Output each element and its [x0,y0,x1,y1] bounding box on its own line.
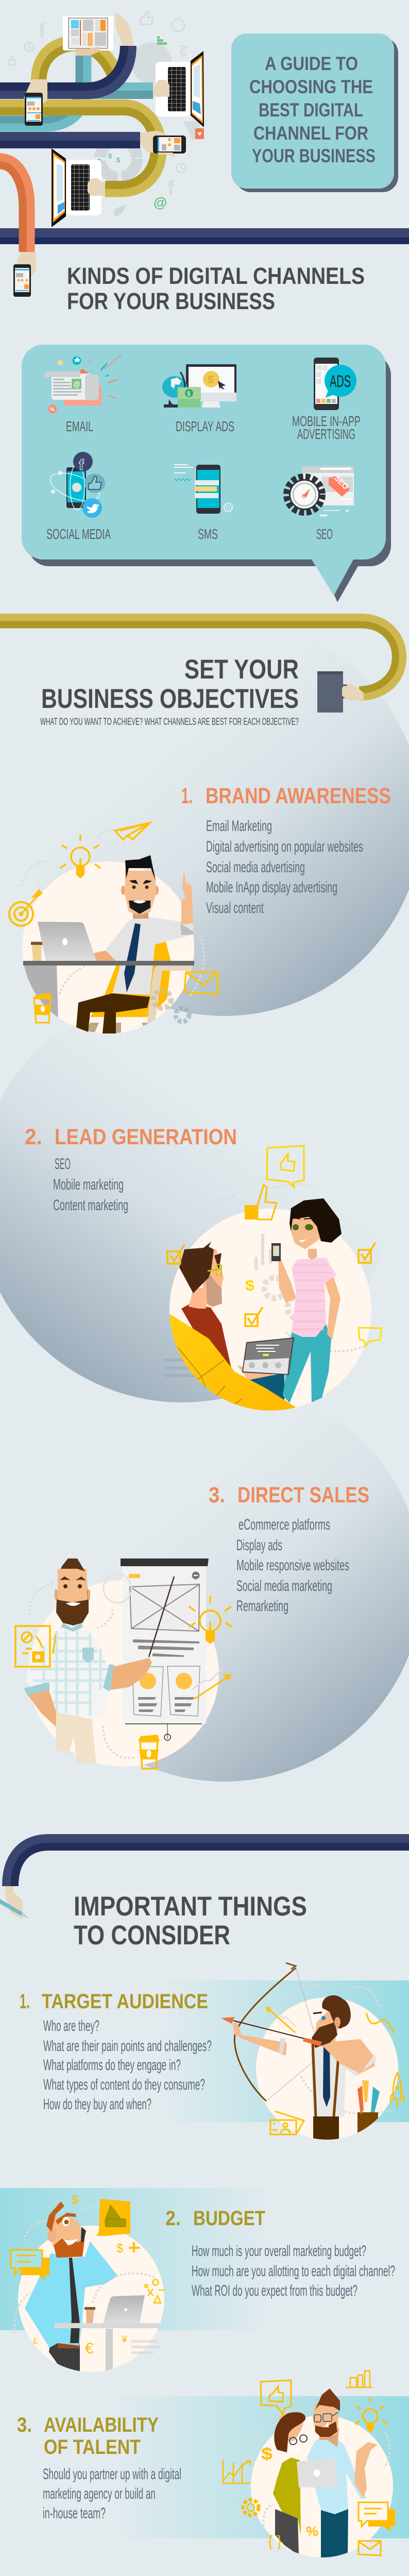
percent icon: % [306,2523,318,2539]
heading: kinds of digital channels: FOR YOUR BUSINESS [67,288,275,314]
currency signs: € [85,2340,94,2357]
dotted trails [14,2204,155,2334]
title card: CHOOSING THE [249,76,373,97]
man lower body [49,2329,113,2375]
typing hand [94,951,116,961]
pen [0,1899,29,1919]
heading: set your business objectives: SET YOUR [184,654,299,685]
objective 3 background blob [26,1385,409,1782]
target icon [9,889,42,926]
talent text: in-house team? [43,2505,106,2522]
heading: important things to consider: IMPORTANT THINGS [74,1891,307,1922]
icon: email [44,354,122,413]
gear icon [243,2500,259,2515]
laptop upper right [156,51,204,127]
bubble shadow [28,354,391,602]
objective 2 heading: 2. [25,1125,42,1149]
objective 1 heading: 1. [181,784,193,808]
objective 2 background blob [0,990,388,1402]
braces icon: { } [268,2533,282,2550]
fingers on phone [157,152,176,157]
cream circle [251,2415,393,2557]
coffee cup [138,1735,160,1769]
talent text: marketing agency or build an [43,2485,156,2502]
shirt [25,2241,117,2348]
target audience list [43,2018,212,2113]
objective 3 list: eCommerce platforms [238,1516,330,1533]
target audience list: How do they buy and when? [43,2096,151,2113]
arm: orange [0,161,27,252]
hand holding phone right [140,131,166,152]
shirt check stripes [30,1631,111,1716]
pencil icon [53,1634,56,1654]
objective 3 heading: 3. [209,1483,225,1507]
desk top [23,961,194,965]
laptop light [313,2469,320,2477]
tie [69,2258,80,2343]
laptop light [124,2308,127,2311]
hand on briefcase [342,684,364,700]
icon: seo: SEO [332,473,350,492]
cream circle [169,1209,371,1411]
target audience list: What types of content do they consume? [43,2076,205,2093]
man body shirt [26,1625,112,1718]
currency signs: $ [116,2242,123,2256]
hand [5,1886,23,1920]
objective 3 list: Remarketing [236,1598,288,1615]
body [311,2043,378,2148]
objective 3 list: Display ads [236,1537,282,1554]
arm: teal holding tablet [0,56,83,124]
objective 1 list: Email Marketing [206,818,272,835]
arm: gold with briefcase [0,621,399,713]
head [121,855,159,919]
shirt cuff [279,2038,286,2056]
tie [124,923,141,992]
navy horizontal arm [0,228,409,244]
talent heading: OF TALENT [44,2436,141,2459]
faint background icons: f [39,20,45,42]
objective 1 list: Social media advertising [206,859,305,876]
woman shirt [292,1258,336,1337]
objective 3 list [236,1516,349,1615]
envelope icon [359,2541,381,2555]
currency signs: ¥ [121,2334,128,2345]
label: sms: SMS [198,526,218,542]
dollar icon: $ [245,1277,254,1294]
illustration: couple with tablet [155,1146,382,1422]
objective 1 background blob [26,619,409,1016]
quiver arrows [357,2080,380,2115]
title card: CHANNEL FOR [253,123,368,144]
hero illustration: arms and devices [0,11,204,297]
dollar signs: $ [108,152,112,160]
budget heading: BUDGET [193,2207,265,2230]
cuff left [24,1682,50,1696]
woman shirt stripes [293,1265,332,1329]
illustration: archer [221,1963,404,2148]
front arm [237,2030,287,2056]
title card: A GUIDE TO [265,53,358,74]
heading: kinds of digital channels: KINDS OF DIGITAL CHANNELS [67,263,365,289]
currency signs: $ [72,2193,78,2207]
hand on bow [233,2022,242,2038]
squiggle icon [366,2013,394,2033]
head [312,1995,351,2048]
man desk scene clipped [23,942,193,1033]
faded lines [131,2340,160,2354]
thumbs-up large [245,1185,277,1219]
shirt [105,917,193,995]
hand holding phone left [24,79,47,106]
objective 1 list: Visual content [206,900,264,917]
faint background icons [8,11,202,216]
dotted trails [287,1986,391,2114]
coffee cup [84,2307,95,2323]
target audience list: Who are they? [43,2018,99,2035]
checkboxes [167,1243,376,1326]
man body and beanbag [169,1304,296,1411]
bulb icon [355,2398,387,2433]
phone landscape [153,135,186,154]
objective 3 list: Social media marketing [236,1578,332,1595]
hand holding tablet top [115,12,133,46]
icon: email: % [50,407,55,413]
objective 2 heading: LEAD GENERATION [55,1125,237,1149]
sleeve right [103,1664,114,1691]
pants [76,993,150,1033]
dotted trails [200,1184,376,1351]
math symbols [145,2279,165,2303]
light bulb [189,1596,232,1644]
desk [54,2323,160,2328]
faint background icons: Aa [176,44,190,58]
laptop [103,2295,145,2324]
speech bubble with money [96,2199,130,2236]
at sign icon: @ [154,195,167,210]
growth arrow icon [265,2007,296,2032]
head [46,2201,86,2258]
dotted trails [254,2424,390,2537]
dotted trails [30,1583,137,1758]
heading: kinds of digital channels [67,263,365,314]
icon: display ads: $ [187,390,191,397]
man head [313,2388,340,2447]
raised arm [181,870,193,924]
hand under tablet [76,46,99,56]
talent text [43,2466,181,2522]
panel: target audience strip [160,1980,409,2122]
panel: talent strip [111,2396,409,2538]
budget heading: 2. [165,2207,181,2230]
faint background icons: f [167,177,175,199]
woman phone [271,1243,281,1261]
talent heading [17,2414,159,2459]
cream circle [28,1580,219,1767]
arrow [221,2017,322,2046]
label: mobile in-app advertising: ADVERTISING [297,426,355,442]
icon: mobile ads [314,358,356,410]
woman head [289,1198,342,1260]
heading: set your business objectives: BUSINESS OBJECTIVES [41,684,299,714]
laptop [297,2458,338,2487]
tablet in hands [63,16,113,50]
light bulb [60,835,100,878]
illustration: man on phone [11,2193,165,2375]
icon: display ads: $ [208,374,214,386]
objective 2 list: Mobile marketing [53,1176,124,1193]
dollar signs [97,152,121,167]
chat icon [359,1328,382,1346]
dotted trails [22,830,204,997]
growth arrow [192,1669,232,1699]
coffee on desk [31,942,43,961]
arm: big gold [0,107,159,189]
cream circle [256,1997,398,2140]
bars icon [346,2371,372,2387]
woman right arm [323,1273,340,1340]
head [55,1558,90,1625]
envelope outline [184,972,218,994]
talent text: Should you partner up with a digital [43,2466,181,2483]
talent heading: AVAILABILITY [44,2414,159,2436]
clipboard icon [15,1626,50,1667]
right arm and pointer [110,1577,174,1690]
heading: important things to consider [74,1891,307,1951]
coffee cup outline [32,993,52,1023]
icon: mobile ads: ADS [330,372,351,391]
arm: navy holding pen [0,1842,409,1920]
title card: YOUR BUSINESS [252,145,376,166]
budget heading [165,2207,265,2230]
currency signs: £ [33,2337,38,2346]
icon: social media: f [79,457,84,473]
phone left [25,93,43,126]
currency signs [33,2193,128,2357]
tablet [243,1338,294,1375]
trousers [56,1712,96,1764]
title card [231,33,398,192]
arm: teal horizontal [0,82,153,99]
title card: BEST DIGITAL [259,99,363,121]
growth chart icon [223,2460,250,2483]
icon: email: @ [73,380,80,388]
rear arm [319,2039,375,2076]
left arm [28,1690,60,1736]
woman head [274,2411,307,2452]
label: email: EMAIL [66,418,93,434]
bow [234,1963,320,2101]
man head [179,1242,224,1309]
panel: digital channels speech bubble [22,345,391,602]
woman pants [283,1324,331,1403]
plus icon [129,2242,140,2252]
illustration: man presenting wireframe [15,1558,232,1769]
chat icon [11,2250,49,2280]
hand on laptop upper right [153,80,169,97]
target audience heading: TARGET AUDIENCE [42,1990,208,2013]
talent heading: 3. [17,2414,32,2436]
icon: social media [46,452,105,518]
laptop lower left [52,148,101,227]
laptop [38,922,96,961]
icon: seo [287,466,354,516]
objective 2 list: Content marketing [53,1197,128,1214]
objective 3 heading [209,1483,369,1507]
woman left arm [278,1260,296,1303]
objective 1 list [206,818,363,917]
objective 2 list [53,1156,128,1214]
cream circle [18,2226,164,2372]
label: mobile in-app advertising [292,413,361,442]
cream circle [22,861,194,1033]
dollar signs: $ [116,156,121,164]
briefcase [317,671,347,713]
orange arm over bar [23,206,27,252]
like bubble icon [261,2380,291,2415]
budget list [192,2243,395,2299]
label: display ads: DISPLAY ADS [176,418,234,434]
arm: gold arc holding phone [39,43,114,80]
bubble fill [22,345,386,596]
icon: sms [174,464,232,514]
flip board [121,1558,209,1740]
man body clipped [273,2437,367,2557]
paper plane [115,823,150,840]
label: mobile in-app advertising: MOBILE IN-APP [292,413,361,429]
illustration: man at desk [9,823,218,1033]
target audience list: What are their pain points and challenges? [43,2038,212,2055]
illustration: two colleagues [223,2371,395,2557]
dollar signs: $ [97,157,102,167]
faded text lines [164,1359,203,1377]
collar [61,1623,83,1632]
faint clock [104,1574,131,1603]
objective 3 heading: DIRECT SALES [237,1483,369,1507]
heading: set your business objectives [40,654,299,727]
id card icon [270,2111,304,2134]
target audience heading: 1. [20,1990,30,2013]
rocket icon [390,2073,404,2107]
dollar icon: $ [261,2444,272,2463]
panel: budget strip [0,2188,273,2330]
hand on laptop lower left [88,178,105,196]
chat icon [359,2502,395,2531]
laptop light [62,938,67,945]
faded gears [256,1234,310,1319]
green bars icon [157,36,167,45]
hand and phone bottom [13,252,36,297]
target audience list: What platforms do they engage in? [43,2057,181,2074]
objective 2 list: SEO [55,1156,71,1173]
thumbs-up speech bubble [267,1146,304,1187]
man arm [354,2442,378,2498]
icon: display ads [162,364,236,408]
gears [154,991,189,1022]
heading: important things to consider: TO CONSIDER [74,1920,230,1951]
orange tag [195,128,204,139]
label: seo: SEO [316,526,333,542]
sleeve [180,923,193,935]
pocket [82,1648,94,1663]
sleeve [340,2053,376,2076]
label: social media: SOCIAL MEDIA [46,526,111,542]
arm: navy upper [0,46,128,91]
arm: navy lower [0,132,140,148]
